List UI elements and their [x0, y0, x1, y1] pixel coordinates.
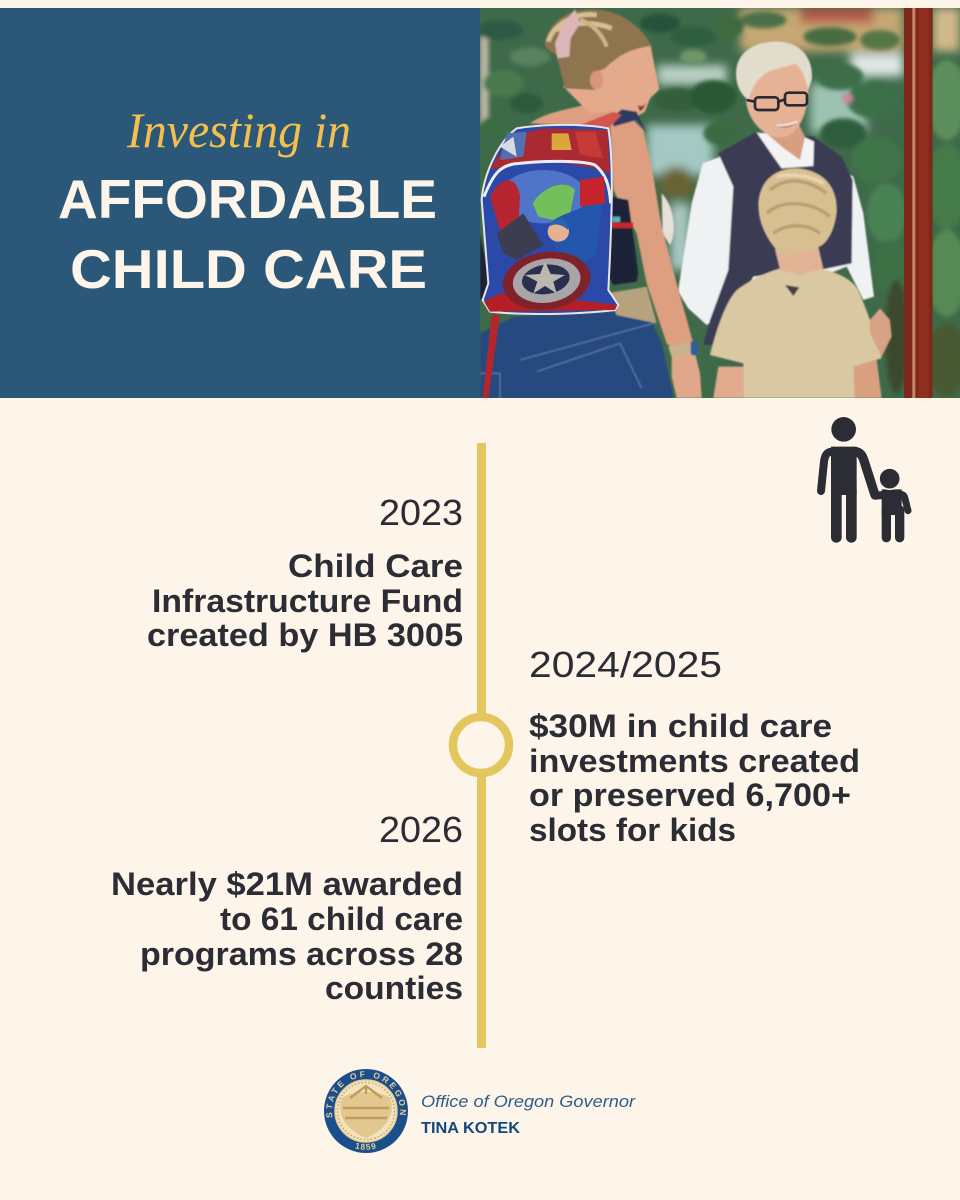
footer: state seal	[324, 1069, 408, 1153]
milestone 2023: Child Care	[288, 548, 463, 584]
milestone 2024/2025: slots for kids	[529, 812, 736, 848]
footer: office name: Office of Oregon Governor	[421, 1092, 636, 1111]
footer: state seal: STATE OF OREGON	[326, 1071, 406, 1118]
milestone 2024/2025: $30M in child care	[529, 708, 832, 744]
timeline	[453, 443, 509, 1048]
heading: Affordable Child Care	[58, 168, 437, 300]
milestone 2023	[147, 492, 463, 653]
milestone 2026: 2026	[379, 809, 463, 850]
footer: state seal: 1859	[355, 1143, 376, 1150]
milestone 2023: Infrastructure Fund	[152, 583, 463, 619]
milestone 2024/2025	[529, 644, 860, 848]
heading: Affordable Child Care: CHILD CARE	[70, 238, 427, 300]
milestone 2024/2025: or preserved 6,700+	[529, 777, 851, 813]
header panel	[0, 8, 480, 398]
backpack	[482, 125, 618, 398]
woman	[480, 9, 702, 398]
glasses	[747, 93, 807, 110]
heading: Affordable Child Care: AFFORDABLE	[58, 168, 437, 230]
milestone 2023: created by HB 3005	[147, 617, 463, 653]
footer: office name	[421, 1092, 636, 1137]
milestone 2026: programs across 28	[140, 936, 463, 972]
icon: adult and child holding hands	[821, 417, 908, 538]
pole	[904, 8, 933, 398]
heading: Investing in: Investing in	[126, 102, 351, 158]
milestone 2026	[111, 809, 463, 1006]
milestone 2026: Nearly $21M awarded	[111, 866, 463, 902]
milestone 2024/2025: investments created	[529, 743, 860, 779]
child	[710, 168, 892, 398]
photo: woman with backpack, governor and child	[477, 8, 960, 398]
milestone 2026: to 61 child care	[220, 901, 463, 937]
footer: office name: TINA KOTEK	[421, 1120, 520, 1137]
milestone 2023: 2023	[379, 492, 463, 533]
timeline marker	[453, 717, 509, 773]
governor	[678, 42, 874, 345]
milestone 2026: counties	[325, 970, 463, 1006]
milestone 2024/2025: 2024/2025	[529, 644, 722, 685]
